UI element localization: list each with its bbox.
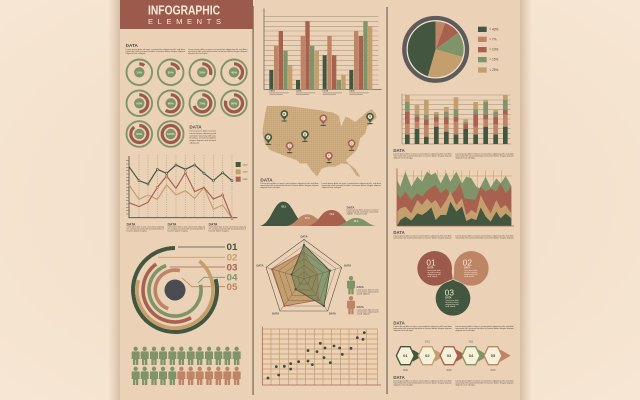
radar legend figures: consectetuer adipiscing elit — [357, 290, 379, 293]
pie legend: = 15% — [489, 58, 499, 62]
area chart caption: nonummy nibh euismod tincidunt ut laoreet dolore magna aliquam — [455, 236, 514, 239]
line chart legend: 2010 — [243, 172, 248, 174]
bump chart note: DATA — [347, 205, 355, 209]
pin D: D — [304, 132, 306, 136]
timeline caption: aliquam erat volutpat. — [455, 384, 476, 387]
radial chart numbers: 02 — [226, 252, 238, 264]
stacked bar caption: Lorem ipsum dolor sit amet, consectetuer adipiscing elit, sed diam — [393, 153, 452, 156]
stacked bar caption: aliquam erat volutpat. — [393, 157, 414, 160]
bump area chart: 74.9 — [329, 213, 335, 216]
line chart legend — [236, 162, 248, 182]
leader lines — [158, 247, 225, 287]
timeline caption: DATA — [393, 375, 406, 380]
pie slice 10% — [436, 23, 458, 49]
circle 03 — [436, 280, 470, 316]
line chart captions: DATA — [127, 222, 136, 226]
circle 01: Lorem ipsum dolor — [427, 269, 441, 272]
donut side note: magna aliquam erat volutpat — [189, 139, 216, 142]
ring 60%: 60% — [168, 101, 174, 105]
radial chart numbers: 03 — [226, 262, 238, 274]
radar legend figures: sed diam — [357, 293, 370, 295]
map caption: aliquam erat volutpat. — [322, 186, 342, 189]
donut side note: consectetuer adipiscing elit — [189, 132, 216, 135]
timeline years: 1990 — [403, 370, 409, 372]
map caption: nonummy nibh euismod tincidunt ut laoreet dolore magna aliquam — [260, 184, 319, 187]
radar chart: DATA — [272, 312, 279, 316]
ring 20%: 20% — [168, 70, 174, 74]
circle 03: 03 — [445, 287, 454, 297]
pie legend — [478, 27, 499, 73]
grouped bar chart: DATA — [269, 90, 275, 93]
radar chart — [257, 234, 351, 316]
step 04: 04 — [469, 353, 474, 358]
pie slice 43% — [408, 21, 436, 76]
line chart captions: DATA — [209, 222, 218, 226]
radial chart numbers: 05 — [226, 282, 238, 293]
circle 03: sit amet consect — [445, 301, 459, 304]
map caption: Lorem ipsum dolor sit amet, consectetuer adipiscing elit, sed diam — [322, 182, 381, 185]
circles caption: nonummy nibh euismod tincidunt ut laoreet dolore magna aliquam — [455, 327, 514, 330]
radar legend figures: consectetuer adipiscing elit — [357, 310, 379, 313]
circle 03: DATA — [445, 297, 452, 300]
title banner: INFOGRAPHIC — [148, 4, 220, 18]
pie chart — [404, 18, 467, 81]
arc 05 — [155, 270, 180, 309]
grouped bar chart: DATA — [296, 90, 302, 93]
circles caption: nonummy nibh euismod tincidunt ut laoreet dolore magna aliquam — [393, 327, 452, 330]
circle 01: sed diam — [427, 276, 438, 278]
line chart captions: elit, sed diam nonummy nibh euismod tincidunt ut — [168, 228, 205, 231]
line chart captions: laoreet dolore magna — [168, 230, 188, 233]
left column data text: nonummy nibh euismod tincidunt ut laoreet dolore magna aliquam — [126, 50, 185, 53]
line chart captions: Lorem ipsum dolor sit amet, consectetuer adipiscing — [168, 226, 206, 229]
left column data text — [126, 43, 248, 55]
timeline caption: nonummy nibh euismod tincidunt ut laoreet dolore magna aliquam — [393, 382, 452, 385]
timeline years — [403, 341, 496, 372]
bump area chart: 38.4 — [354, 220, 359, 223]
radar chart: DATA — [329, 312, 336, 316]
line chart captions: elit, sed diam nonummy nibh euismod tincidunt ut — [209, 228, 246, 231]
panel shadows — [108, 0, 532, 400]
circle 02: 02 — [463, 258, 472, 268]
line chart captions — [127, 222, 247, 233]
line chart captions: elit, sed diam nonummy nibh euismod tincidunt ut — [127, 228, 164, 231]
radial chart numbers: 04 — [226, 272, 238, 283]
radar chart: DATA — [344, 263, 351, 267]
arc 04 — [149, 266, 201, 316]
donut side note — [189, 125, 217, 144]
step 05: 05 — [491, 353, 496, 358]
step 03: 03 — [447, 353, 452, 358]
circles caption — [393, 320, 514, 332]
ring 10%: 10% — [136, 70, 143, 74]
pin A: A — [267, 135, 269, 139]
arc 01 — [133, 248, 217, 332]
circle 02: sit amet consect — [464, 271, 478, 274]
circle 02 — [453, 251, 489, 286]
circles caption: aliquam erat volutpat. — [393, 329, 414, 332]
circle 01 — [417, 251, 453, 286]
map caption — [260, 177, 381, 189]
pin F: F — [328, 154, 330, 158]
stacked area chart — [397, 168, 514, 227]
ring 70%: 70% — [199, 101, 206, 105]
radar legend figures: Lorem ipsum dolor sit amet — [357, 288, 379, 291]
circle 02: Lorem ipsum dolor — [464, 269, 478, 272]
circles caption: DATA — [393, 320, 406, 325]
timeline years: 2006 — [446, 370, 452, 372]
area chart caption — [393, 230, 514, 239]
grouped bar chart: DATA — [323, 90, 329, 93]
map silhouette — [262, 106, 377, 177]
timeline caption: Lorem ipsum dolor sit amet, consectetuer adipiscing elit, sed diam — [393, 380, 452, 383]
bump area chart: 83.3 — [281, 207, 287, 209]
timeline caption: nonummy nibh euismod tincidunt ut laoreet dolore magna aliquam — [455, 382, 514, 385]
bump area chart: 67.3 — [305, 218, 310, 220]
radar chart: DATA — [257, 263, 264, 267]
ring 50%: 50% — [136, 101, 143, 105]
donut percentage rings — [126, 60, 247, 147]
pie legend: = 43% — [489, 27, 499, 31]
stacked bar caption: aliquam erat volutpat. — [455, 157, 476, 160]
people pictogram — [132, 347, 241, 385]
title banner — [120, 0, 253, 29]
circle 01: sit amet consect — [427, 271, 441, 274]
bump chart note: nibh euismod — [347, 214, 368, 216]
line chart — [126, 155, 248, 219]
donut side note: sed diam nonummy nibh euis — [189, 135, 216, 137]
scatter plot — [262, 327, 381, 385]
map caption: DATA — [260, 177, 273, 182]
stacked bar caption: nonummy nibh euismod tincidunt ut laoreet dolore magna aliquam — [393, 155, 452, 158]
pin C: C — [289, 144, 291, 148]
line chart captions: Lorem ipsum dolor sit amet, consectetuer adipiscing — [127, 226, 165, 229]
radial chart numbers — [226, 242, 238, 293]
circle 03: sed diam — [445, 306, 456, 308]
donut side note: Lorem ipsum dolor sit amet — [189, 130, 216, 133]
map caption: Lorem ipsum dolor sit amet, consectetuer adipiscing elit, sed diam — [260, 182, 319, 185]
circle 01: 01 — [426, 258, 436, 268]
circles caption: aliquam erat volutpat. — [455, 329, 476, 332]
grouped bar chart — [264, 8, 382, 94]
hexagon timeline — [396, 341, 511, 372]
circle 02: DATA — [464, 267, 470, 270]
bump chart note: Lorem ipsum dolor sit amet, consect — [347, 209, 379, 212]
left column data text: aliquam erat volutpat. — [126, 52, 146, 55]
area chart caption: Lorem ipsum dolor sit amet, consectetuer adipiscing elit, sed diam — [393, 234, 452, 237]
donut side note: tincidunt ut laoreet dolore — [189, 137, 217, 140]
timeline years: 2016 — [490, 370, 496, 372]
stacked bar chart — [402, 93, 511, 144]
map caption: nonummy nibh euismod tincidunt ut laoreet dolore magna aliquam — [322, 184, 381, 187]
radar legend figures: Lorem ipsum dolor sit amet — [357, 308, 379, 311]
circle 01: adipiscing elit — [427, 273, 441, 276]
pin B: B — [283, 112, 285, 116]
line chart legend: 2020 — [243, 179, 248, 181]
bump chart note: adipiscing elit, sed diam nonummy — [347, 211, 379, 214]
line chart captions: laoreet dolore magna — [127, 230, 147, 233]
step 01: 01 — [403, 353, 408, 358]
grouped bar chart: DATA — [349, 90, 355, 93]
three-circle diagram — [417, 251, 489, 316]
pie slice 25% — [428, 49, 463, 77]
ring 80%: 80% — [231, 101, 237, 105]
line chart captions: Lorem ipsum dolor sit amet, consectetuer adipiscing — [209, 226, 247, 229]
radar legend figures: DATA — [357, 305, 364, 309]
circle 03: adipiscing elit — [445, 303, 459, 306]
area chart caption: DATA — [393, 230, 406, 235]
bump area chart — [260, 202, 376, 226]
circles caption: Lorem ipsum dolor sit amet, consectetuer adipiscing elit, sed diam — [455, 325, 514, 328]
radar legend figures — [347, 276, 379, 315]
pie legend: = 25% — [489, 68, 499, 72]
timeline years: 2011 — [468, 341, 474, 343]
line chart captions: laoreet dolore magna — [209, 230, 229, 233]
pin H: H — [369, 115, 371, 119]
circle 02: sed diam — [464, 276, 474, 278]
timeline caption — [393, 375, 514, 387]
pie legend: = 7% — [489, 37, 497, 41]
pin E: E — [322, 116, 324, 120]
column dividers — [253, 6, 388, 395]
arc 02 — [137, 261, 213, 328]
left column data text: DATA — [126, 43, 139, 48]
ring 30%: 30% — [199, 70, 206, 74]
poster panel — [120, 0, 520, 400]
pie legend: = 10% — [489, 48, 499, 52]
pin G: G — [351, 141, 353, 145]
dotted USA map with pins — [262, 106, 377, 177]
left column data text: Lorem ipsum dolor sit amet, consectetuer adipiscing elit, sed diam — [126, 48, 185, 51]
left column data text: aliquam erat volutpat. — [188, 52, 208, 55]
radar legend figures: DATA — [357, 285, 364, 289]
circle 02: adipiscing elit — [464, 273, 478, 276]
area chart caption: nonummy nibh euismod tincidunt ut laoreet dolore magna aliquam — [393, 236, 452, 239]
step 02: 02 — [425, 353, 430, 358]
line chart legend: 2000 — [243, 164, 248, 166]
title banner: ELEMENTS — [148, 17, 221, 26]
left column data text: nonummy nibh euismod tincidunt ut laoreet dolore magna aliquam — [188, 50, 247, 53]
radar chart: DATA — [301, 234, 308, 238]
area chart caption: Lorem ipsum dolor sit amet, consectetuer adipiscing elit, sed diam — [455, 234, 514, 237]
map caption: aliquam erat volutpat. — [260, 186, 281, 189]
radar legend figures: sed diam — [357, 313, 370, 315]
timeline caption: Lorem ipsum dolor sit amet, consectetuer adipiscing elit, sed diam — [455, 380, 514, 383]
pie slice 15% — [436, 33, 464, 57]
pie slice 7% — [436, 21, 445, 49]
circles caption: Lorem ipsum dolor sit amet, consectetuer adipiscing elit, sed diam — [393, 325, 452, 328]
stacked bar caption: Lorem ipsum dolor sit amet, consectetuer adipiscing elit, sed diam — [455, 153, 514, 156]
stacked bar caption — [393, 148, 514, 160]
bump chart note — [347, 205, 379, 216]
radial chart numbers: 01 — [226, 242, 238, 253]
ring 40%: 40% — [231, 70, 237, 74]
timeline caption: aliquam erat volutpat. — [393, 384, 414, 387]
donut side note: aliquam — [189, 142, 200, 144]
ring 100%: 100% — [167, 132, 175, 136]
ring 90%: 90% — [136, 132, 143, 136]
stacked bar caption: DATA — [393, 148, 406, 153]
stacked bar caption: nonummy nibh euismod tincidunt ut laoreet dolore magna aliquam — [455, 155, 514, 158]
line chart captions: DATA — [168, 222, 177, 226]
radial arc chart — [133, 247, 225, 332]
arc 03 — [143, 264, 191, 322]
circle 01: DATA — [427, 267, 434, 270]
circle 03: Lorem ipsum dolor — [445, 299, 459, 302]
left column data text: Lorem ipsum dolor sit amet, consectetuer adipiscing elit, sed diam — [188, 48, 248, 51]
donut side note: DATA — [189, 125, 202, 130]
timeline years: 2001 — [425, 341, 431, 343]
